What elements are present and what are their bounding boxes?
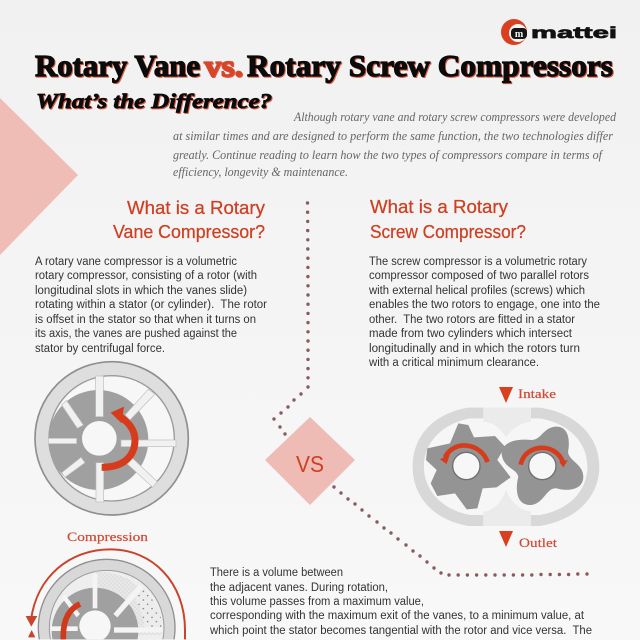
text: volume description: the adjacent vanes. During rotation, [210, 582, 388, 594]
title: vs. [204, 48, 243, 83]
text: rotary vane description: A rotary vane compressor is a volumetric [35, 256, 237, 268]
text: volume description: There is a volume between [210, 567, 343, 579]
text: volume description: corresponding with the maximum exit of the vanes, to a minimum value, at [210, 610, 585, 622]
subtitle: What’s the Difference? [36, 89, 272, 113]
intro text: greatly. Continue reading to learn how the two types of compressors compare in terms of [173, 148, 604, 162]
text: volume description [209, 567, 592, 637]
logo: mattei: mattei [531, 25, 617, 42]
intro text: efficiency, longevity & maintenance. [173, 165, 348, 179]
label: outlet: Outlet [519, 535, 557, 550]
text: rotary vane description: rotating within a stator (or cylinder). The rotor [35, 299, 267, 311]
diagram: compression stage [26, 548, 186, 640]
dotted connector: top [272, 201, 310, 436]
label: intake [499, 386, 556, 403]
label: intake: Intake [518, 386, 556, 401]
text: rotary screw description [368, 256, 600, 369]
title: Rotary Screw Compressors [247, 48, 613, 83]
text: rotary screw description: compressor composed of two parallel rotors [369, 270, 589, 282]
dotted connector: bottom [332, 485, 589, 577]
text: volume description: which point the stator becomes tangential with the rotor and vice versa. The [209, 625, 592, 637]
text: rotary screw description: made from two cylinders which intersect [369, 328, 573, 340]
heading: rotary screw: What is a Rotary [370, 196, 509, 217]
text: rotary vane description [35, 256, 267, 355]
heading: rotary vane: Vane Compressor? [113, 221, 265, 242]
text: rotary screw description: with a critical minimum clearance. [368, 357, 539, 369]
text: rotary screw description: other. The two rotors are fitted in a stator [369, 314, 575, 326]
text: volume description: this volume passes from a maximum value, [210, 596, 424, 608]
heading: rotary screw: Screw Compressor? [370, 221, 526, 242]
text: rotary vane description: longitudinal slots in which the vanes slide) [35, 285, 247, 297]
title: Rotary Vane [35, 48, 200, 83]
VS diamond [265, 417, 355, 505]
text: rotary screw description: enables the two rotors to engage, one into the [369, 299, 600, 311]
heading: rotary vane: What is a Rotary [127, 197, 266, 218]
logo: mattei: m [515, 29, 524, 40]
VS diamond: VS [296, 451, 324, 477]
logo: mattei [501, 19, 617, 45]
text: rotary vane description: rotary compressor, consisting of a rotor (with [35, 270, 257, 282]
text: rotary screw description: longitudinally and in which the rotors turn [369, 343, 580, 355]
text: rotary screw description: The screw compressor is a volumetric rotary [369, 256, 587, 268]
text: rotary vane description: stator by centrifugal force. [35, 343, 165, 355]
intro text: at similar times and are designed to perform the same function, the two technologies differ [173, 129, 614, 143]
label: compression: Compression [67, 529, 149, 544]
text: rotary vane description: its axis, the vanes are pushed against the [35, 328, 237, 340]
text: rotary vane description: is offset in the stator so that when it turns on [35, 314, 256, 326]
intro text [173, 110, 617, 179]
text: rotary screw description: with external helical profiles (screws) which [368, 285, 585, 297]
heading: rotary vane [113, 197, 266, 242]
title [35, 48, 613, 83]
intro text: Although rotary vane and rotary screw compressors were developed [293, 110, 617, 124]
heading: rotary screw [370, 196, 526, 242]
diagram: rotary vane compressor [35, 362, 188, 515]
label: outlet [499, 531, 557, 550]
decorative left triangle [0, 98, 78, 255]
diagram: rotary screw compressor [413, 408, 599, 526]
